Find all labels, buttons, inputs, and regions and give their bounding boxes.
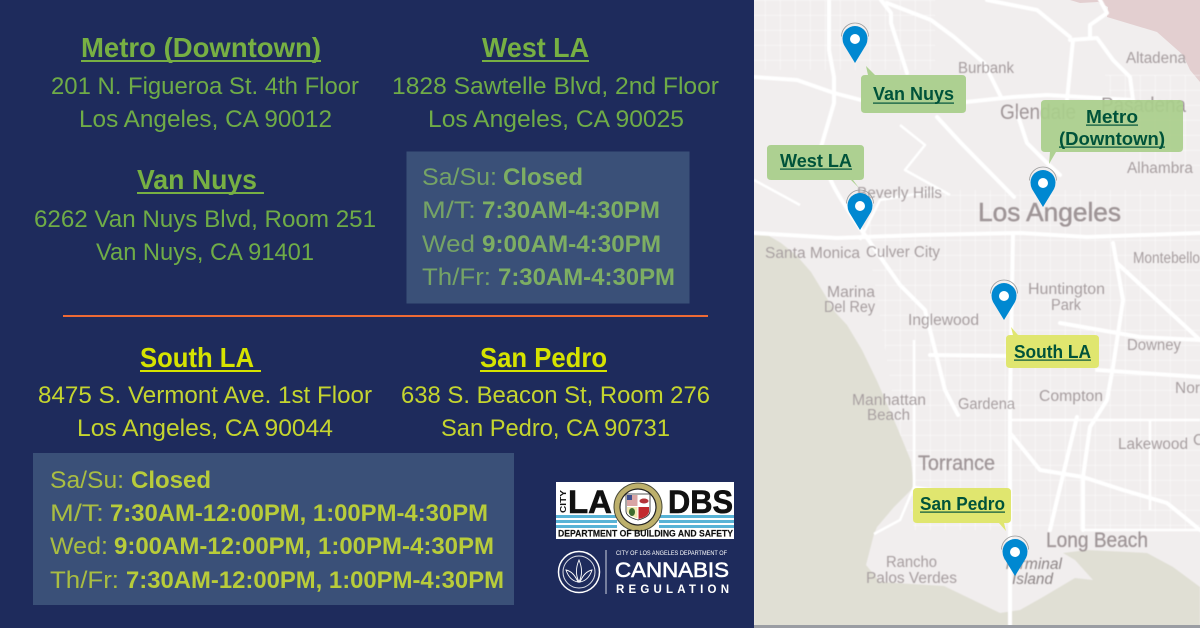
callout: Van Nuys	[861, 66, 966, 113]
panel: Metro (Downtown) address	[51, 32, 359, 133]
city labels: Culver City	[866, 244, 940, 261]
panel: West LA address: Los Angeles, CA 90025	[428, 106, 684, 133]
city labels: Lakewood	[1118, 436, 1188, 453]
water	[754, 233, 1200, 628]
city labels: Manhattan	[852, 392, 926, 409]
icon: pin Van Nuys	[842, 23, 868, 63]
city labels: Beach	[867, 407, 910, 424]
city labels: Island	[1012, 571, 1054, 588]
city labels: Huntington	[1028, 281, 1105, 298]
mountains	[1070, 0, 1200, 82]
logo: LA Department of Building and Safety: DEPARTMENT OF BUILDING AND SAFETY	[558, 528, 733, 538]
panel: hours, yellow offices: M/T:	[50, 500, 104, 527]
map	[754, 0, 1200, 628]
logo: LA Department of Building and Safety: DBS	[668, 484, 733, 520]
callout: South LA: South LA	[1014, 341, 1091, 362]
logo: LA Department of Building and Safety: CITY	[558, 490, 568, 513]
city labels: Burbank	[958, 60, 1014, 77]
panel: hours, green offices: 7:30AM-4:30PM	[498, 264, 675, 291]
major roads	[754, 0, 1200, 625]
panel: hours, green offices	[406, 152, 690, 304]
logo: Department of Cannabis Regulation: CITY OF LOS ANGELES DEPARTMENT OF	[616, 550, 727, 557]
callout: West LA	[767, 145, 864, 188]
panel: hours, yellow offices: Th/Fr:	[50, 567, 119, 594]
panel: South LA address	[38, 342, 372, 442]
panel: San Pedro address: San Pedro, CA 90731	[441, 415, 670, 442]
city labels: Del Rey	[824, 299, 875, 316]
panel: hours, green offices: 9:00AM-4:30PM	[482, 231, 661, 258]
city labels: Nor	[1175, 380, 1200, 397]
panel: San Pedro address: 638 S. Beacon St, Room 276	[401, 382, 710, 409]
logo: Department of Cannabis Regulation	[558, 550, 729, 596]
panel: Van Nuys address: Van Nuys, CA 91401	[96, 239, 314, 266]
panel: Metro (Downtown) address: Metro (Downtown)	[81, 32, 321, 63]
logo: LA Department of Building and Safety	[556, 482, 734, 539]
city labels: Torrance	[918, 452, 995, 475]
panel: Metro (Downtown) address: 201 N. Figueroa St. 4th Floor	[51, 73, 359, 100]
callout: San Pedro	[913, 488, 1011, 531]
panel: Metro (Downtown) address: Los Angeles, CA 90012	[79, 106, 332, 133]
city labels: Pasadena	[1101, 94, 1186, 117]
city labels: Altadena	[1126, 50, 1186, 67]
panel: hours, green offices: Sa/Su:	[422, 164, 497, 191]
callout: Metro (Downtown)	[1041, 100, 1183, 164]
panel: hours, yellow offices: Wed:	[50, 533, 108, 560]
panel: South LA address: South LA	[140, 342, 254, 373]
panel: hours, green offices: Closed	[503, 164, 583, 191]
callout: South LA	[1006, 327, 1099, 368]
icon: pin Metro	[1030, 167, 1056, 207]
panel: hours, yellow offices	[33, 453, 514, 605]
panel: Van Nuys address: 6262 Van Nuys Blvd, Room 251	[34, 206, 376, 233]
panel: hours, yellow offices: 7:30AM-12:00PM, 1:00PM-4:30PM	[126, 567, 504, 594]
panel: San Pedro address: San Pedro	[480, 342, 607, 373]
city labels: Santa Monica	[765, 245, 860, 262]
icon: pin San Pedro	[1002, 536, 1028, 576]
panel: South LA address: 8475 S. Vermont Ave. 1st Floor	[38, 382, 372, 409]
city labels: Inglewood	[908, 312, 979, 329]
city labels: Park	[1051, 297, 1081, 314]
city labels: Compton	[1039, 388, 1103, 405]
panel: hours, green offices: 7:30AM-4:30PM	[482, 197, 660, 224]
logo: LA Department of Building and Safety: LA	[568, 484, 612, 520]
panel: West LA address: West LA	[482, 32, 589, 63]
city labels: Gardena	[958, 396, 1015, 413]
callout: Metro (Downtown): (Downtown)	[1059, 128, 1165, 149]
city labels: Los Angeles	[978, 197, 1121, 227]
city labels: Rancho	[886, 554, 937, 571]
panel: San Pedro address	[401, 342, 710, 442]
city labels: Terminal	[1003, 556, 1063, 573]
city labels: Marina	[827, 284, 875, 301]
panel: hours, yellow offices: 9:00AM-12:00PM, 1:00PM-4:30PM	[114, 533, 494, 560]
callout: San Pedro: San Pedro	[920, 493, 1005, 514]
panel: West LA address	[392, 32, 719, 133]
panel: Van Nuys address: Van Nuys	[137, 164, 257, 195]
panel: West LA address: 1828 Sawtelle Blvd, 2nd Floor	[392, 73, 719, 100]
city labels: Glendale	[1000, 101, 1076, 124]
callout: Van Nuys: Van Nuys	[873, 83, 954, 104]
panel: Van Nuys address	[34, 164, 376, 266]
panel: hours, yellow offices: Sa/Su:	[50, 467, 124, 494]
callout: Metro (Downtown): Metro	[1086, 106, 1138, 127]
city labels: Alhambra	[1127, 160, 1193, 177]
background	[0, 0, 754, 628]
city labels: Beverly Hills	[857, 185, 942, 202]
city labels: Long Beach	[1046, 529, 1148, 552]
panel: South LA address: Los Angeles, CA 90044	[77, 415, 333, 442]
panel: hours, green offices: Th/Fr:	[422, 264, 491, 291]
panel: hours, yellow offices: 7:30AM-12:00PM, 1:00PM-4:30PM	[110, 500, 488, 527]
callout: West LA: West LA	[780, 150, 852, 171]
panel: hours, green offices: M/T:	[422, 197, 476, 224]
panel: hours, yellow offices: Closed	[131, 467, 211, 494]
city labels: Downey	[1127, 337, 1181, 354]
icon: pin South LA	[990, 280, 1018, 320]
icon: pin West LA	[846, 190, 874, 230]
city labels: Palos Verdes	[866, 570, 957, 587]
logo: Department of Cannabis Regulation: REGULATION	[616, 584, 729, 596]
logo: Department of Cannabis Regulation: CANNABIS	[615, 559, 729, 582]
panel: hours, green offices: Wed	[422, 231, 475, 258]
city labels	[765, 50, 1200, 588]
